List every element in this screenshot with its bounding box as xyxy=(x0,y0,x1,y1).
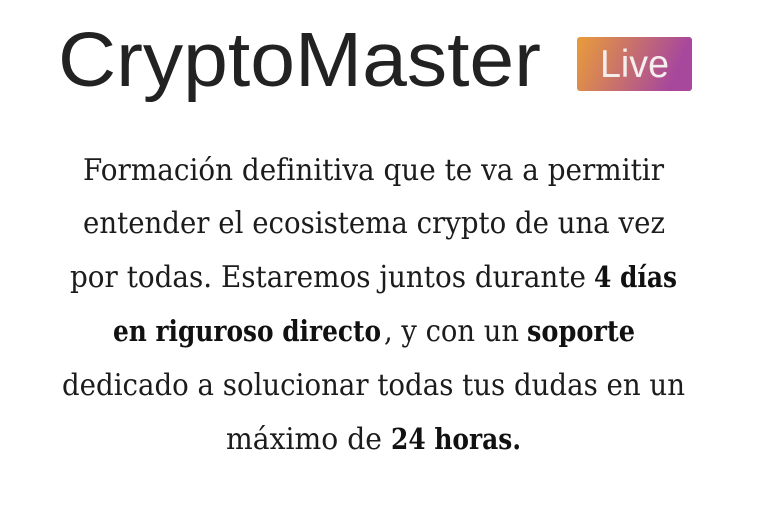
text block: course description xyxy=(62,153,685,456)
text block: course description: por todas. Estaremos juntos durante xyxy=(70,260,586,294)
text block: course description: 4 días xyxy=(594,260,677,294)
text block: course description: Formación definitiva que te va a permitir xyxy=(83,153,665,187)
text block: course description: en riguroso directo xyxy=(113,314,381,348)
badge: Live: Live xyxy=(600,43,669,86)
text block: course description: máximo de xyxy=(226,422,382,456)
text block: course description: dedicado a solucionar todas tus dudas en un xyxy=(62,368,685,402)
text block: course description: 24 horas. xyxy=(391,422,521,456)
badge: Live xyxy=(577,37,692,91)
text block: course description: soporte xyxy=(527,314,635,348)
text block: course description: , y con un xyxy=(384,314,519,348)
title: CryptoMaster logo: CryptoMaster xyxy=(58,17,541,103)
text block: course description: entender el ecosistema crypto de una vez xyxy=(83,206,665,240)
